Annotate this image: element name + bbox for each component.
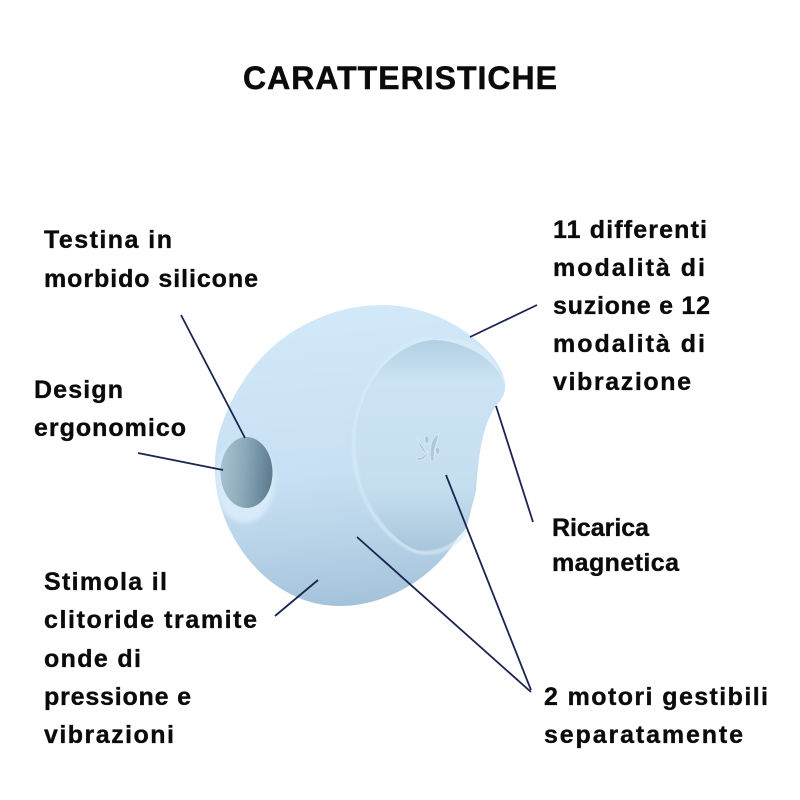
leader line: modes bbox=[470, 305, 537, 337]
label: modes: modalità di bbox=[553, 330, 705, 358]
label: modes: vibrazione bbox=[553, 368, 691, 396]
leader line: silicone head bbox=[181, 315, 245, 438]
label: silicone head: Testina in bbox=[44, 226, 172, 254]
label: stimulation: pressione e bbox=[44, 683, 191, 711]
leader line: magnetic charging bbox=[496, 406, 533, 522]
label: modes bbox=[553, 216, 710, 396]
nozzle opening bbox=[220, 437, 272, 508]
label: stimulation: onde di bbox=[44, 645, 141, 673]
label: stimulation: Stimola il bbox=[44, 568, 167, 596]
label: stimulation bbox=[44, 568, 257, 749]
label: magnetic charging bbox=[552, 514, 680, 577]
product: blue device bbox=[215, 305, 505, 606]
device body bbox=[215, 305, 505, 606]
label: motors bbox=[544, 683, 768, 749]
label: modes: modalità di bbox=[553, 254, 705, 282]
leader line: motor two bbox=[357, 537, 531, 692]
nozzle rim bbox=[216, 453, 274, 524]
leader line: motor one bbox=[446, 475, 531, 690]
disc highlight rim bbox=[354, 338, 467, 553]
label: magnetic charging: magnetica bbox=[552, 549, 680, 577]
label: stimulation: clitoride tramite bbox=[44, 606, 257, 634]
label: motors: 2 motori gestibili bbox=[544, 683, 768, 711]
label: silicone head bbox=[44, 226, 258, 293]
label: ergonomic design bbox=[34, 376, 186, 442]
label: modes: suzione e 12 bbox=[553, 292, 710, 320]
label: silicone head: morbido silicone bbox=[44, 265, 258, 293]
label: stimulation: vibrazioni bbox=[44, 721, 174, 749]
label: modes: 11 differenti bbox=[553, 216, 707, 244]
logo mark bbox=[417, 434, 440, 461]
label: ergonomic design: Design bbox=[34, 376, 123, 404]
label: magnetic charging: Ricarica bbox=[552, 514, 650, 542]
recessed disc bbox=[356, 340, 503, 550]
leader line: stimulation bbox=[275, 580, 318, 616]
leader line: ergonomic design bbox=[138, 453, 223, 470]
label: ergonomic design: ergonomico bbox=[34, 414, 186, 442]
lip of the disc bbox=[433, 339, 505, 385]
title: CARATTERISTICHE bbox=[243, 60, 557, 96]
label: motors: separatamente bbox=[544, 721, 743, 749]
